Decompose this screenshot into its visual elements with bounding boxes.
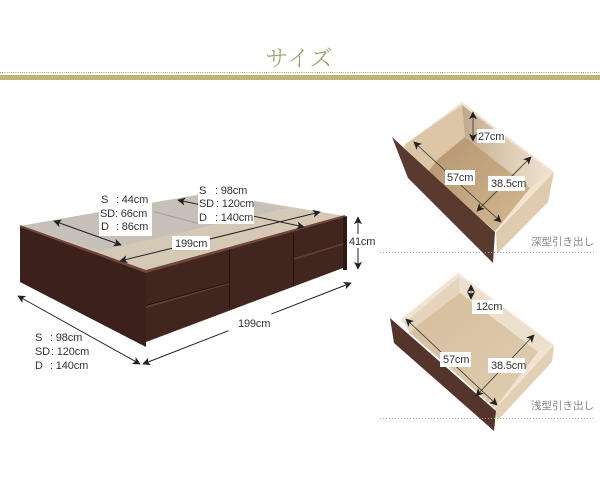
dimension: bed width below: SD xyxy=(35,346,50,358)
deep drawer dimensions xyxy=(414,112,531,222)
deep drawer side face xyxy=(496,172,554,254)
dimension: bed length on top: 199cm xyxy=(175,238,207,250)
deep drawer front panel xyxy=(392,137,495,263)
dimension: bed width on top: : 98cm xyxy=(215,185,247,197)
bed front panel with drawers xyxy=(146,217,343,342)
deep drawer xyxy=(380,102,595,263)
deep drawer caption: 深型引き出し xyxy=(531,235,594,248)
dimension: bed depth on top: : 86cm xyxy=(116,221,148,233)
deep drawer dimensions: 38.5cm xyxy=(491,178,526,190)
dimension: bed length below xyxy=(143,283,351,364)
shallow drawer dimensions: 57cm xyxy=(443,354,469,366)
dimension: bed width on top: : 120cm xyxy=(216,198,254,210)
deep drawer left inner wall xyxy=(404,105,465,172)
dimension: bed depth on top xyxy=(54,194,152,245)
bed left side panel xyxy=(20,226,146,347)
shallow drawer outer rim xyxy=(400,273,554,409)
title divider band xyxy=(0,72,600,80)
dimension: bed depth on top: S xyxy=(101,194,108,206)
dimension: bed length on top xyxy=(120,212,320,261)
shallow drawer dimensions: 12cm xyxy=(476,301,502,313)
dimension: bed depth on top: D xyxy=(101,221,109,233)
bed illustration xyxy=(20,193,347,347)
dimension: bed width below: : 98cm xyxy=(50,332,82,344)
shallow drawer dimensions xyxy=(406,285,534,405)
deep drawer dimensions: 57cm xyxy=(447,172,473,184)
shallow drawer left inner wall xyxy=(404,277,460,333)
dimension: bed width on top: S xyxy=(199,185,206,197)
shallow drawer back inner wall xyxy=(459,277,551,352)
dimension: bed depth on top: SD xyxy=(100,208,115,220)
dimension: bed width below: : 120cm xyxy=(51,346,89,358)
dimension: bed depth on top: : 66cm xyxy=(115,208,147,220)
dimension: bed depth on top: : 44cm xyxy=(116,194,148,206)
shallow drawer xyxy=(380,273,595,431)
deep drawer floor xyxy=(428,137,530,231)
dimension: bed length below: 199cm xyxy=(238,318,270,330)
dimension: bed height xyxy=(349,217,377,269)
dimension: bed width on top: : 140cm xyxy=(215,212,253,224)
deep drawer dimensions: 27cm xyxy=(478,131,504,143)
shallow drawer caption: 浅型引き出し xyxy=(531,399,594,412)
dimension: bed width on top xyxy=(178,183,304,227)
dimension: bed width on top: SD xyxy=(199,198,214,210)
deep drawer back inner wall xyxy=(462,105,551,188)
dimension: bed width below: S xyxy=(35,332,42,344)
shallow drawer dimensions: 38.5cm xyxy=(491,360,526,372)
dimension: bed width below: D xyxy=(35,360,43,372)
dimension: bed width on top: D xyxy=(199,212,207,224)
dimension: bed height: 41cm xyxy=(349,236,375,248)
deep drawer outer rim xyxy=(404,102,554,232)
shallow drawer side face xyxy=(495,345,554,421)
shallow drawer floor xyxy=(410,293,538,408)
dimension: bed width below: : 140cm xyxy=(50,360,88,372)
title: サイズ xyxy=(265,46,333,71)
dimension: bed width below xyxy=(18,296,140,372)
bed storage lid panels xyxy=(20,193,287,251)
bed top surface xyxy=(20,193,345,271)
shallow drawer front panel xyxy=(390,318,496,431)
